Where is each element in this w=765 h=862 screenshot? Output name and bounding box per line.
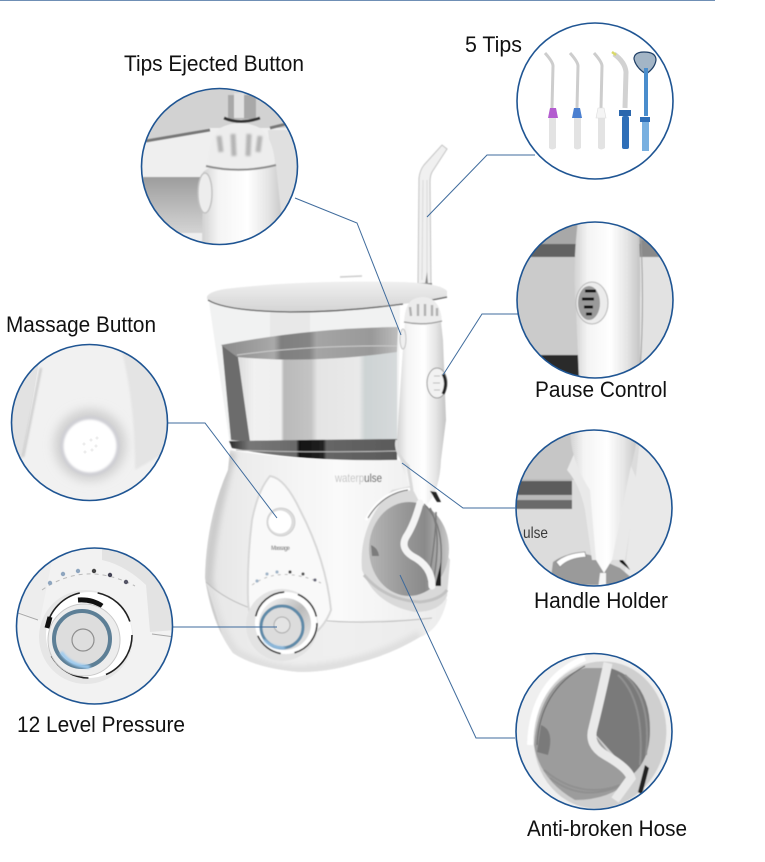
panel: pause control — [515, 220, 675, 381]
leader: massage — [168, 423, 277, 518]
tip: tongue cleaner — [634, 52, 656, 151]
panel: anti-broken hose — [515, 652, 673, 810]
massage button — [267, 508, 295, 536]
hose holder — [362, 486, 450, 612]
leader: pressure — [173, 626, 277, 628]
panel: tips ejected button — [140, 85, 300, 250]
label: pause control: Pause Control — [535, 377, 667, 402]
pressure dial — [246, 589, 318, 661]
panel: 5 tips — [517, 23, 673, 179]
tip: purple — [545, 53, 558, 150]
leader: handle holder — [402, 463, 515, 508]
leader lines — [168, 155, 535, 738]
panel: handle holder — [514, 428, 676, 590]
lid — [207, 276, 447, 312]
nozzle — [413, 145, 447, 297]
control panel — [248, 476, 331, 650]
base edge shading — [206, 452, 432, 676]
tip: blue — [570, 53, 582, 150]
leader: anti-broken hose — [400, 575, 515, 738]
wordmark crop: ulse — [523, 525, 548, 542]
massage label: Massage — [271, 546, 291, 552]
label: 12 level pressure: 12 Level Pressure — [17, 712, 185, 737]
pause button on handle — [427, 368, 447, 398]
top rule — [0, 0, 715, 1]
wordmark: waterpulse — [334, 471, 382, 485]
leader: tips ejected — [295, 198, 401, 335]
label: tips ejected button: Tips Ejected Button — [124, 51, 304, 76]
base seam — [206, 582, 432, 622]
product: water flosser — [205, 145, 450, 676]
label: 5 tips: 5 Tips — [465, 32, 522, 57]
label: massage button: Massage Button — [6, 312, 156, 337]
handle — [396, 297, 446, 506]
label: anti-broken hose: Anti-broken Hose — [527, 816, 687, 841]
panel: 12 level pressure — [15, 546, 175, 706]
leader: 5 tips — [427, 155, 535, 217]
tip: white — [594, 53, 606, 150]
pressure level dots — [252, 570, 321, 585]
label: handle holder: Handle Holder — [534, 588, 668, 613]
base — [205, 450, 447, 672]
reservoir — [209, 300, 400, 460]
tip: orthodontic — [612, 52, 631, 149]
panel: massage button — [10, 344, 170, 504]
leader: pause control — [443, 314, 518, 375]
